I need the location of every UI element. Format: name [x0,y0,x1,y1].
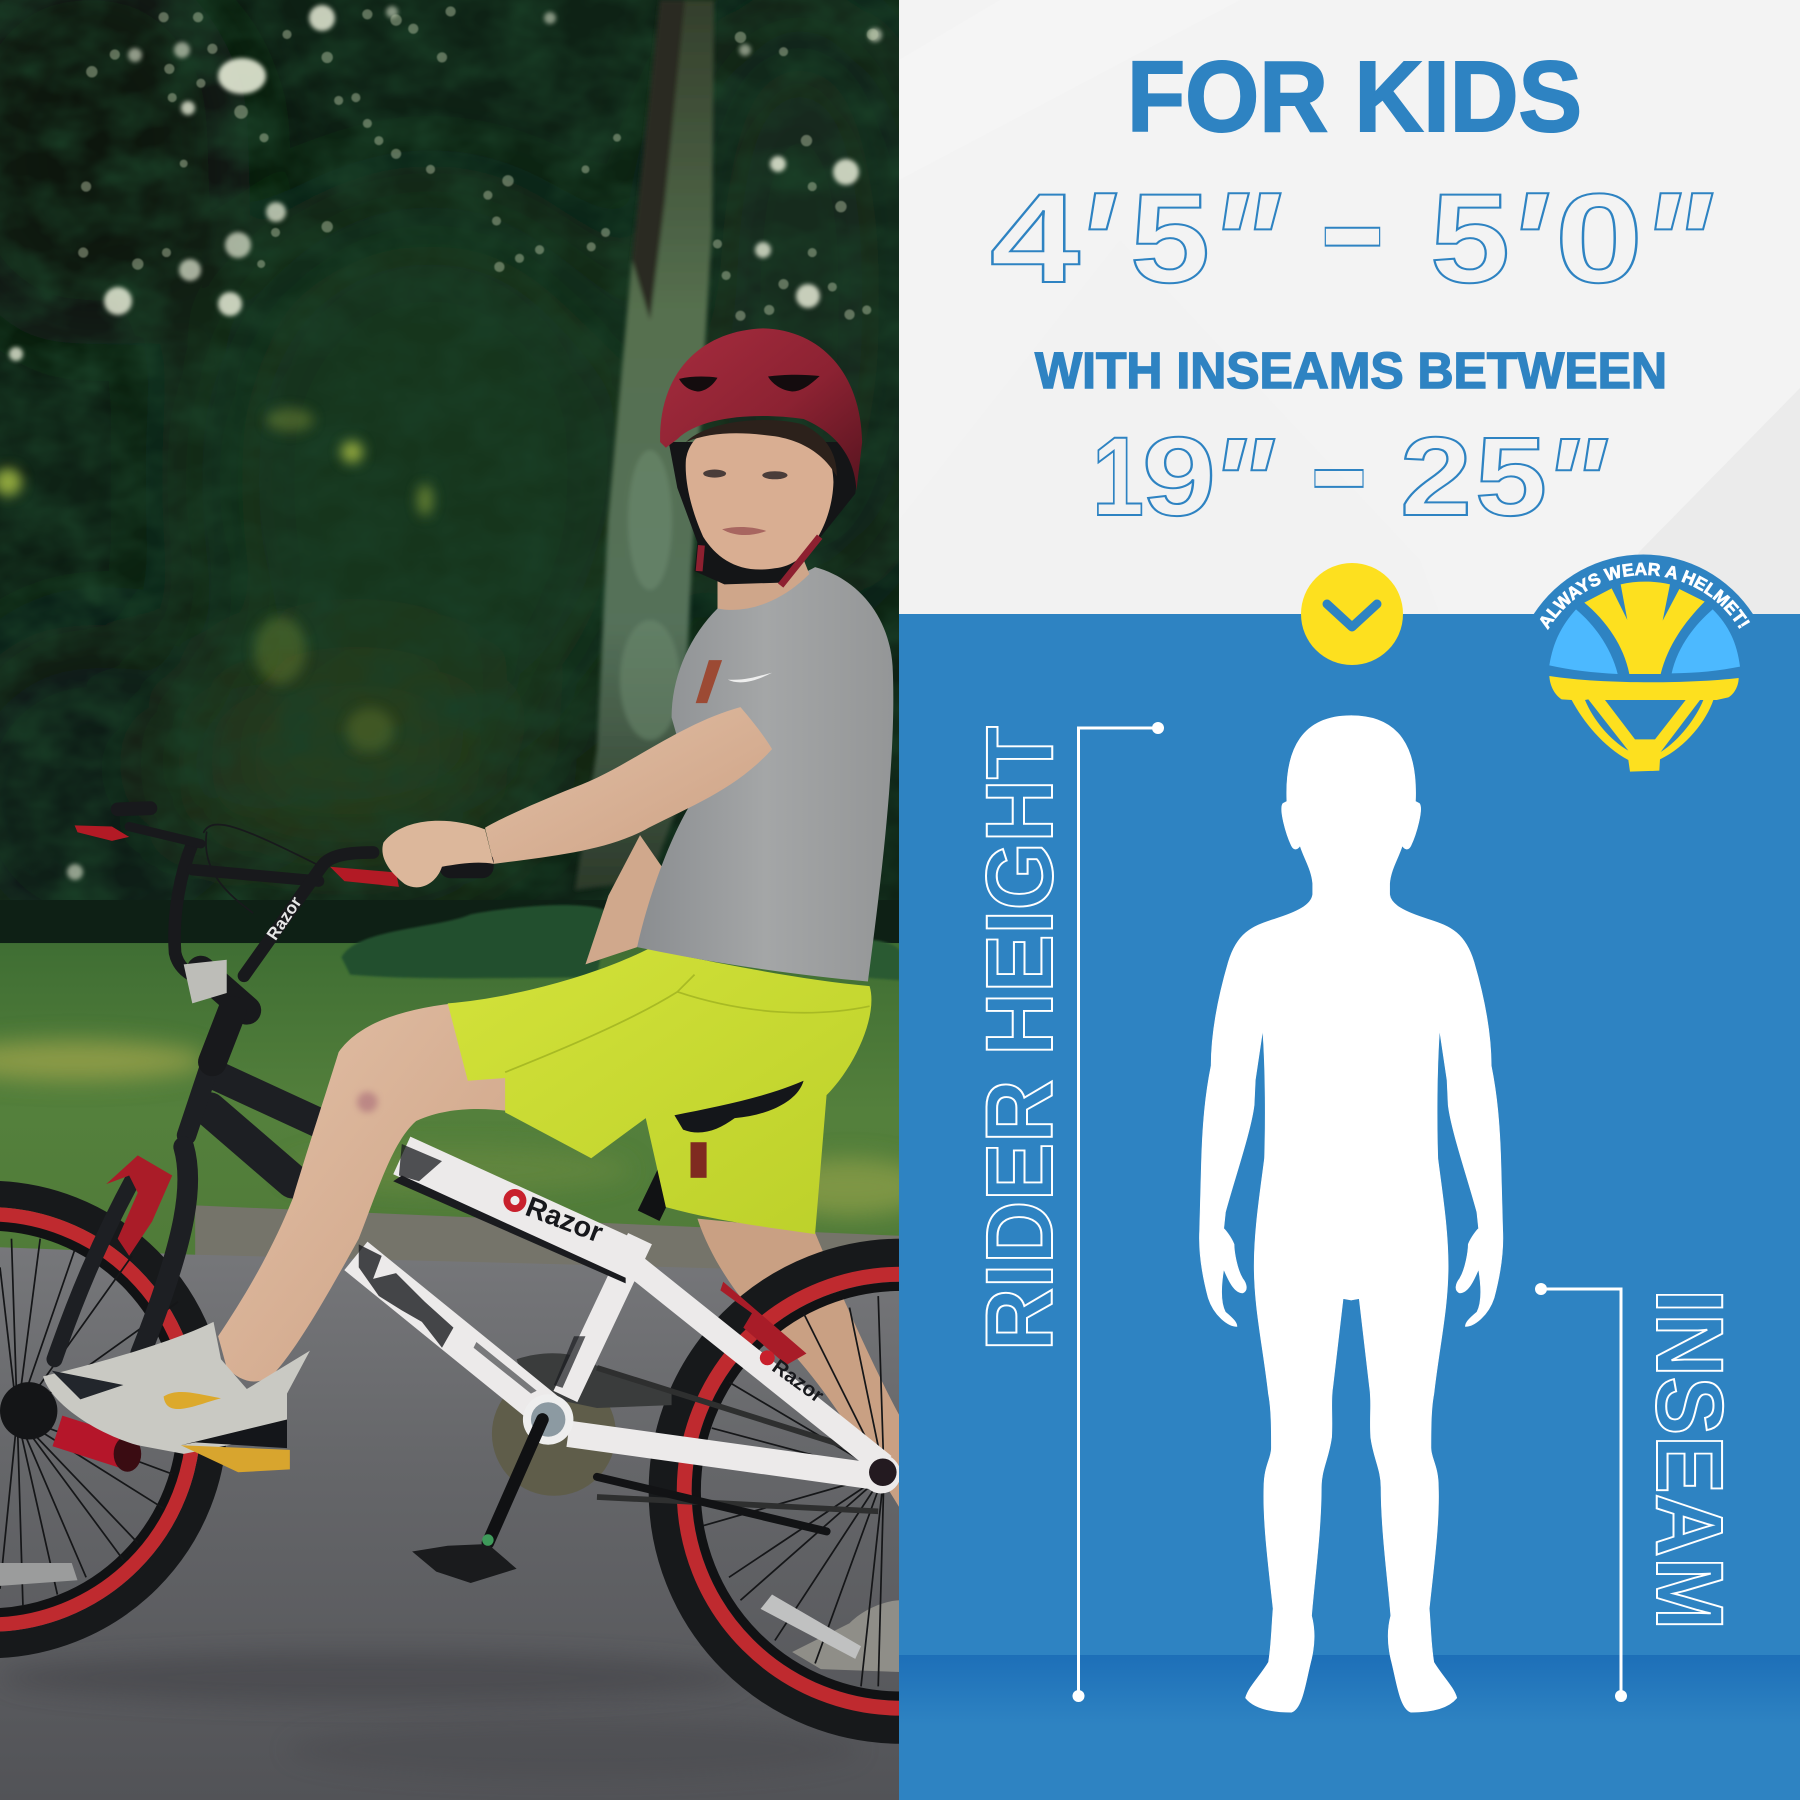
outlined height range: 0 [1555,167,1643,309]
seat reflector [691,1142,707,1178]
sprocket [492,1353,672,1496]
grey t-shirt [637,567,893,982]
bottom bracket [523,1394,573,1445]
icon: always wear a helmet badge [1534,554,1753,772]
arm [485,707,772,864]
boy upper body and helmet [75,328,893,1062]
photo background: lawn, hedge and road [0,900,930,1800]
front footpeg [0,1382,141,1472]
right brake lever [330,867,399,887]
shirt swoosh [728,673,772,682]
road [0,1247,900,1800]
panel: top info background [899,0,1800,615]
hair [686,420,837,476]
razor logo on top tube: Razor [521,1191,607,1249]
frame graphics [359,1144,626,1394]
helmet liner and strap [669,442,861,584]
road shadow [28,1654,718,1700]
face [686,422,833,570]
red strap [699,537,820,585]
grip [439,851,494,878]
shirt mark [696,660,722,703]
outlined inseam range: – [1312,371,1366,561]
saddle [674,1081,804,1133]
outlined height range [990,123,1713,324]
rear brake [720,1282,806,1365]
outlined height range: 5 [1430,167,1510,309]
label: inseam: INSEAM [1636,1289,1742,1630]
rear wheel [648,1238,899,1744]
subheading: with inseams between: WITH INSEAMS BETWEEN [1035,342,1667,399]
neck [718,545,809,610]
outlined height range: ' [1506,162,1549,324]
helmet vents [679,377,718,391]
hand [382,821,494,887]
helmet yellow crown [1584,582,1705,674]
chain guard rod [597,1477,827,1531]
razor logo on top tube [498,1182,607,1249]
left brake lever [75,825,129,841]
small bokeh clusters [78,6,878,321]
heading: for kids: FOR KIDS [1127,41,1582,153]
outlined inseam range: 9 [1142,414,1216,539]
handlebar logo: Razor [262,893,306,944]
photo background: trees [0,0,899,900]
panel: photo of boy on bike [0,0,899,1800]
chain [597,1368,878,1511]
helmet yellow brim [1549,676,1739,772]
rear dropout [862,1454,901,1494]
badge curved text: ALWAYS WEAR A HELMET! [1540,562,1750,630]
rear leg and foot [697,1219,900,1672]
razor logo on seat stay [754,1345,828,1407]
outlined inseam range: 5 [1475,414,1547,539]
sneaker [43,1322,310,1472]
outlined inseam range [1092,371,1608,561]
outlined height range: 5 [1130,167,1210,309]
outlined height range: ' [1074,162,1117,324]
tree trunk [575,0,714,890]
outlined height range: " [1207,162,1281,324]
headlight block [184,960,227,1003]
lime shorts [448,949,871,1234]
outlined inseam range: " [1209,413,1275,552]
bokeh highlights [9,5,882,880]
curb [195,1206,899,1268]
child silhouette [1199,716,1503,1712]
floor band [899,1655,1800,1725]
inseam measure line [1535,1283,1627,1702]
outlined height range: " [1639,162,1713,324]
razor logo on seat stay: Razor [768,1355,828,1407]
helmet right panel [1672,609,1740,673]
black frame tubes [55,1032,327,1359]
label: rider height: RIDER HEIGHT [967,726,1073,1351]
rider height measure line [1072,722,1164,1702]
badge arc [1533,555,1753,615]
outlined inseam range: " [1542,413,1608,552]
panel: blue height chart background [899,614,1800,1800]
icon: yellow chevron circle [1301,563,1403,665]
seat post and saddle [649,1127,692,1216]
front leg [218,1003,511,1382]
bike frame, drivetrain and logos [0,1032,901,1583]
hedge [342,905,608,978]
handlebars [118,808,373,1062]
eyes [703,470,726,478]
white frame tubes [356,1155,884,1477]
outlined inseam range: 2 [1400,414,1472,539]
crank and pedal [412,1419,542,1583]
mouth [722,527,766,535]
helmet shell [660,328,862,491]
lower arm [585,835,666,964]
outlined height range: – [1322,123,1383,324]
front wheel [0,1194,214,1645]
outlined inseam range: 1 [1092,414,1144,539]
helmet left panel [1549,609,1618,674]
outlined height range: 4 [990,167,1080,309]
front brake [106,1155,172,1256]
